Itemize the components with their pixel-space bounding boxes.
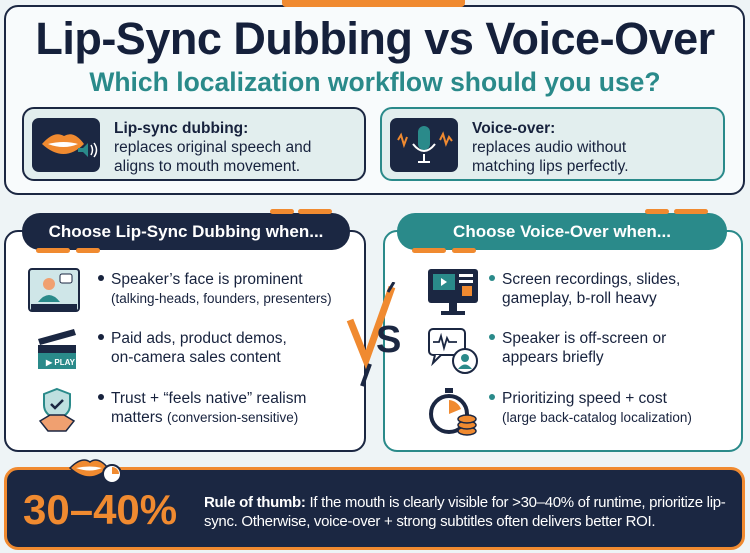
rule text: Rule of thumb: If the mouth is clearly visible for >30–40% of runtime, prioritize lip-sync. Otherwise, voice-over + strong subtitles often delivers better ROI. (204, 494, 725, 530)
row: speaker off-screen (428, 328, 666, 374)
header: choose lip-sync (22, 213, 350, 250)
big stat: 30–40% (23, 486, 177, 533)
text: Prioritizing speed + cost (502, 390, 667, 407)
orange top accent (282, 0, 465, 7)
text (489, 390, 692, 425)
icon: waveform bubble with person (428, 328, 478, 374)
text: (large back-catalog localization) (502, 410, 692, 425)
text: Screen recordings, slides, (502, 271, 680, 288)
text: lip-sync definition (114, 120, 311, 175)
icon: presenter video (28, 268, 80, 312)
header: choose voice-over (397, 213, 727, 250)
text: Trust + “feels native” realism (111, 390, 306, 407)
text: lip-sync definition: aligns to mouth movement. (114, 158, 300, 175)
definition box: voice-over (380, 107, 725, 181)
row: speaker face (28, 268, 332, 312)
definition box: lip-sync (22, 107, 366, 181)
title: Lip-Sync Dubbing vs Voice-Over (35, 13, 715, 64)
icon: monitor (428, 269, 478, 315)
text (98, 330, 287, 366)
VS badge: S (376, 319, 401, 361)
text: Speaker is off-screen or (502, 330, 666, 347)
icon: clapperboard: ▶ PLAY (45, 358, 76, 367)
top panel (4, 5, 745, 195)
text: appears briefly (502, 349, 604, 366)
panel: choose lip-sync (4, 230, 366, 452)
text: (talking-heads, founders, presenters) (111, 291, 332, 306)
text: Speaker’s face is prominent (111, 271, 303, 288)
text: Paid ads, product demos, (111, 330, 287, 347)
VS badge (346, 282, 401, 387)
row: trust (38, 388, 306, 432)
row: screen recordings (428, 269, 680, 315)
header: choose voice-over: Choose Voice-Over when... (453, 222, 671, 241)
text (98, 390, 306, 426)
icon: lips with speaker (32, 118, 100, 172)
rule of thumb bar (4, 467, 745, 550)
icon: clapperboard (38, 329, 76, 369)
text: voice-over definition (472, 120, 628, 175)
text: voice-over definition: replaces audio without (472, 139, 626, 156)
panel: choose voice-over (383, 230, 743, 452)
text: voice-over definition: matching lips perfectly. (472, 158, 628, 175)
header: choose lip-sync: Choose Lip-Sync Dubbing when... (49, 222, 323, 241)
row: speed + cost (429, 388, 692, 436)
text: lip-sync definition: Lip-sync dubbing: (114, 120, 248, 137)
text: on-camera sales content (111, 349, 281, 366)
icon: lips and stopwatch (69, 459, 122, 482)
text: lip-sync definition: replaces original speech and (114, 139, 311, 156)
icon: stopwatch and coins (429, 388, 477, 436)
text (489, 271, 680, 307)
text: matters (conversion-sensitive) (111, 409, 298, 426)
row: paid ads (38, 329, 287, 369)
subtitle: Which localization workflow should you use? (89, 67, 661, 97)
text: voice-over definition: Voice-over: (472, 120, 555, 137)
text (489, 330, 666, 366)
icon: shield handshake (38, 388, 76, 432)
icon: microphone (390, 118, 458, 172)
text (98, 271, 332, 306)
text: gameplay, b-roll heavy (502, 290, 657, 307)
